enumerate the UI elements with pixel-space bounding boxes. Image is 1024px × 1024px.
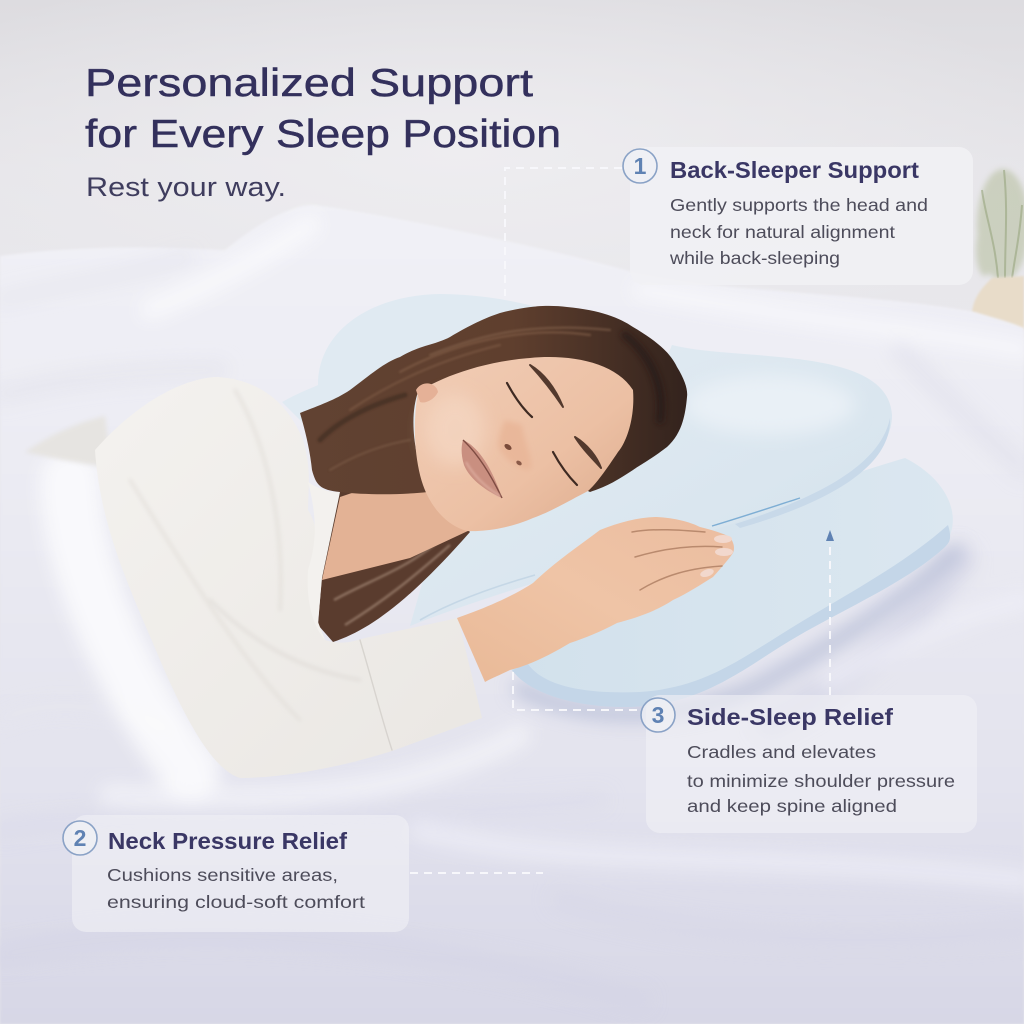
background wall [0,0,1024,340]
shirt folds [130,390,392,750]
number badge 1 [623,149,657,183]
cheek highlight [425,394,485,466]
body 3: and keep spine aligned [687,796,897,816]
nose [499,420,531,470]
body 3 [687,742,955,816]
body 3: to minimize shoulder pressure [687,771,955,791]
body 1: neck for natural alignment [670,222,895,242]
body 2: ensuring cloud-soft comfort [107,892,365,912]
body 2: Cushions sensitive areas, [107,865,338,885]
body 1 [669,195,928,268]
heading 1: Back-Sleeper Support [670,157,919,183]
woman [25,306,734,778]
number badge 2: 2 [74,825,86,851]
connector: callout 3 [513,672,640,710]
face [415,357,633,531]
title [85,62,561,156]
finger lines [632,530,722,590]
bed and duvet [0,205,1024,1024]
eye left [507,383,532,417]
duvet folds [0,225,1024,1000]
arrow: callout 3 up to pillow [826,530,834,695]
arm and hand [457,517,734,682]
lower pillow edge [512,525,950,707]
plant in vase [972,169,1024,330]
callout 1: back-sleeper support [623,147,973,285]
brow right [575,437,601,468]
shirt [95,377,482,778]
title: Personalized Support [85,62,533,105]
number badge 3 [641,698,675,732]
body 2 [107,865,365,912]
eye right [553,452,577,485]
shoulder back [25,416,112,468]
body 1: Gently supports the head and [670,195,928,215]
pillow highlight [685,375,855,435]
neck [322,470,470,580]
lower pillow [510,458,953,706]
subtitle: Rest your way. [86,172,286,202]
main hair [300,306,687,494]
body 3: Cradles and elevates [687,742,876,762]
number badge 3: 3 [652,702,664,728]
callout 3: side-sleep relief [641,695,977,833]
finger nails [699,535,733,579]
body 1: while back-sleeping [669,248,840,268]
back pillow bump [282,294,640,440]
heading 3: Side-Sleep Relief [687,704,893,730]
heading 2: Neck Pressure Relief [108,828,347,854]
upper pillow [410,345,892,626]
connector: callout 1 [505,168,622,296]
lips [462,440,502,498]
ear [416,383,438,403]
collar [308,482,340,640]
number badge 1: 1 [634,153,647,179]
connector: callout 2 [410,872,543,874]
title: for Every Sleep Position [85,113,561,156]
upper pillow edge [735,418,890,528]
lower hair [318,480,470,642]
number badge 2 [63,821,97,855]
callout 2: neck pressure relief [63,815,409,932]
hair strands [320,328,661,470]
brow left [530,365,563,407]
pillow [282,294,960,713]
pillow shadow [515,548,960,713]
